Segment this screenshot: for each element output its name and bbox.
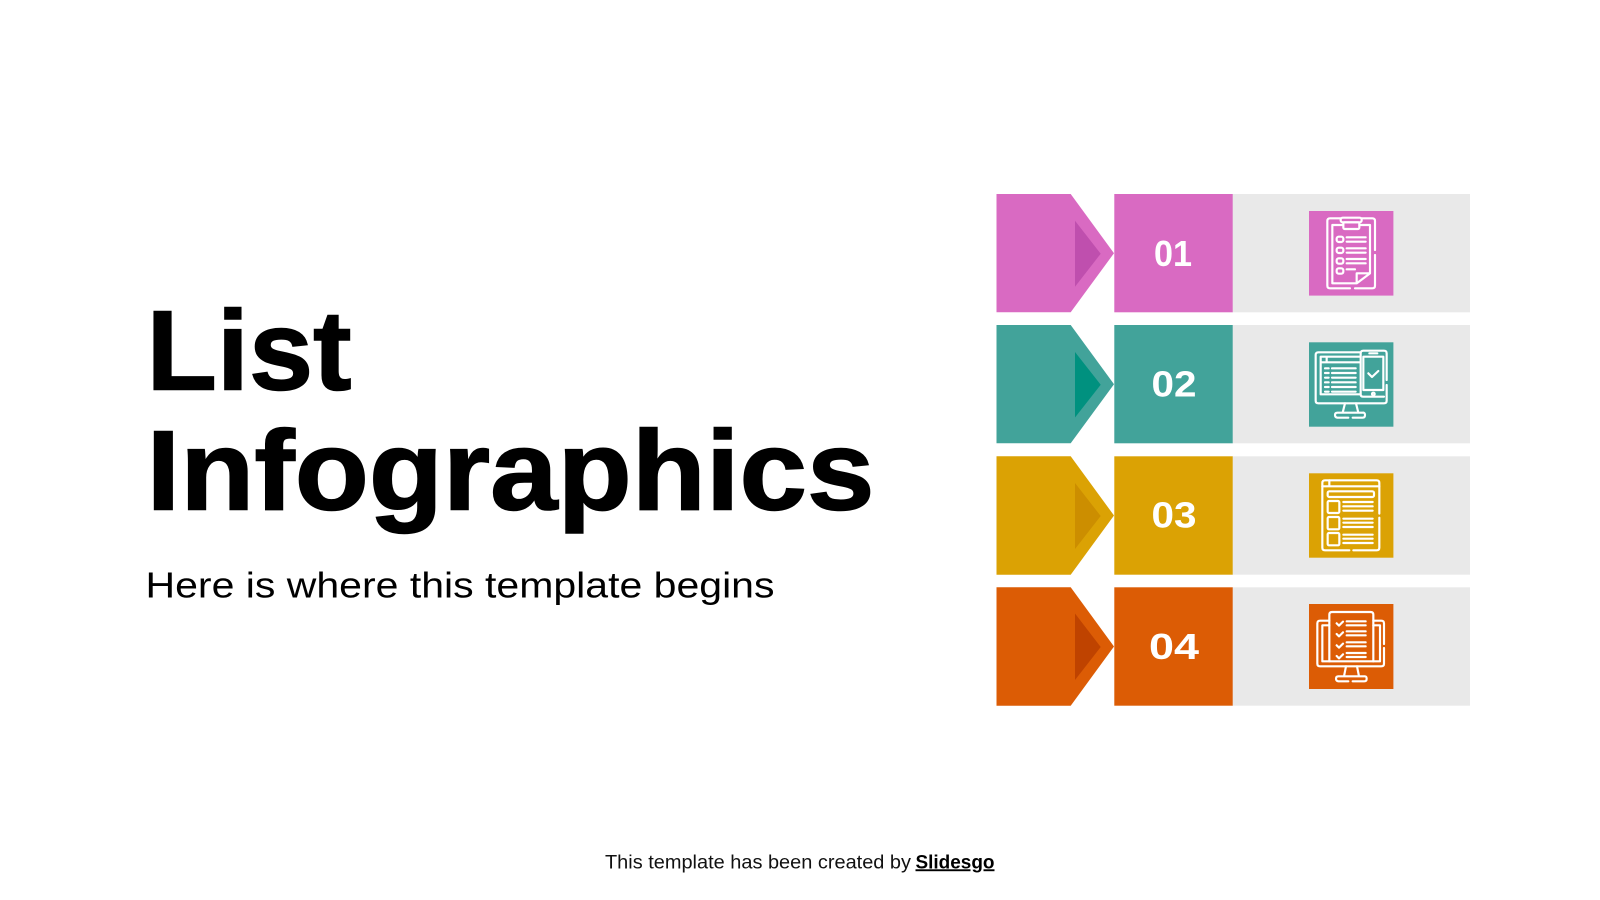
subtitle: Here is where this template begins: [146, 565, 774, 606]
title: List: [146, 287, 352, 413]
row 03 number: 03: [1152, 495, 1196, 536]
row 04 arrow: [996, 587, 1114, 706]
row 03 number block: [1114, 456, 1233, 575]
title: Infographics: [146, 407, 874, 533]
row 04 inner triangle: [1075, 614, 1101, 680]
row 04 icon tile: [1309, 604, 1393, 689]
footer credit: Slidesgo: [916, 852, 994, 873]
list row 04: [996, 587, 1470, 706]
list row 02: [996, 325, 1470, 443]
title: [146, 287, 874, 533]
row 02 number: 02: [1152, 364, 1196, 405]
row 04 grey band: [1232, 587, 1470, 706]
row 04 number block: [1114, 587, 1233, 706]
footer credit: This template has been created by: [605, 852, 912, 873]
row 02 inner triangle: [1075, 352, 1101, 418]
row 02 number block: [1114, 325, 1233, 443]
icon: monitor and phone: [1316, 351, 1387, 418]
icon: clipboard checklist: [1327, 218, 1375, 288]
list row 03: [996, 456, 1470, 575]
row 01 number block: [1114, 194, 1233, 312]
row 01 icon tile: [1309, 211, 1393, 296]
icon: web page list: [1322, 480, 1379, 550]
row 02 arrow: [996, 325, 1114, 443]
icon: monitor checklist: [1317, 612, 1384, 681]
row 01 inner triangle: [1075, 221, 1101, 287]
row 02 grey band: [1232, 325, 1470, 443]
row 02 icon tile: [1309, 342, 1393, 427]
row 01 arrow: [996, 194, 1114, 312]
row 03 grey band: [1232, 456, 1470, 575]
row 03 inner triangle: [1075, 483, 1101, 549]
list row 01: [996, 194, 1470, 312]
row 03 arrow: [996, 456, 1114, 575]
row 01 grey band: [1232, 194, 1470, 312]
row 01 number: 01: [1154, 233, 1192, 274]
row 04 number: 04: [1149, 626, 1199, 667]
row 03 icon tile: [1309, 473, 1393, 558]
